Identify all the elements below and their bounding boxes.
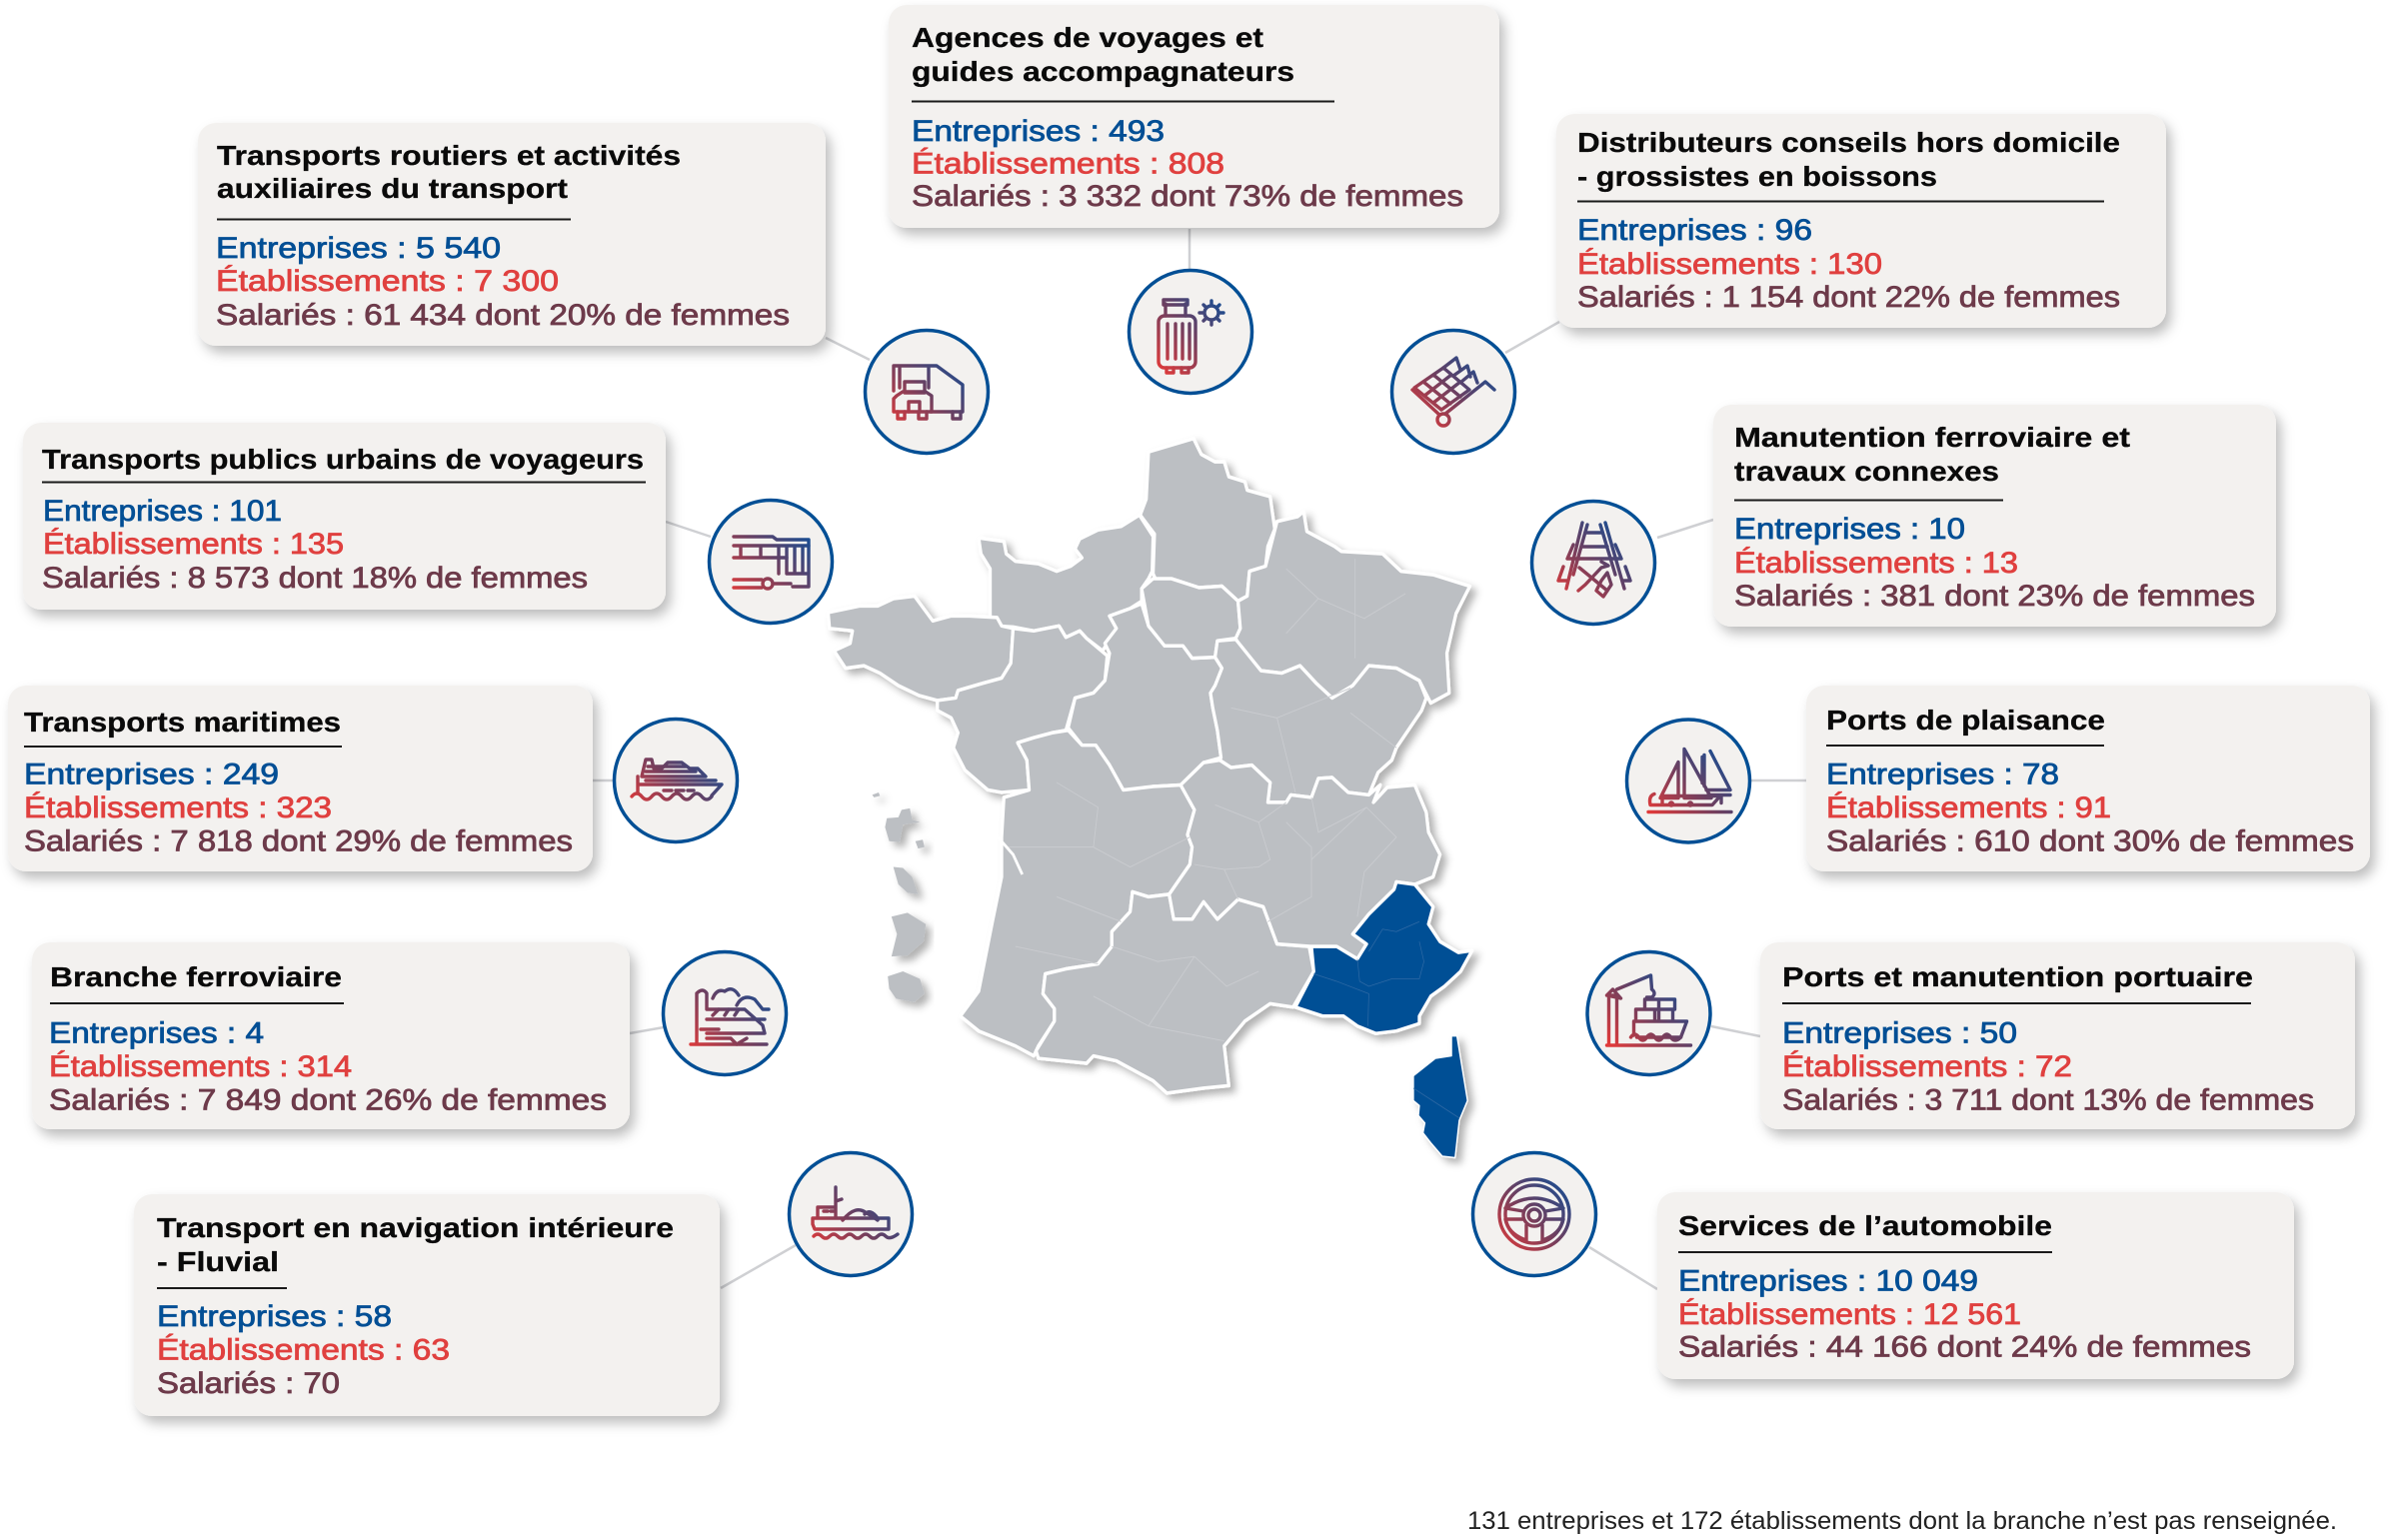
icon: suitcase and sun [1130,270,1251,394]
panel: Agences de voyages: Entreprises : 493 [912,115,1165,148]
panel: Transports maritimes: Établissements : 323 [24,791,332,824]
region: Bretagne [828,596,1014,701]
panel: Distributeurs conseils: Salariés : 1 154 dont 22% de femmes [1577,281,2120,314]
panel: Transports publics urbains: Entreprises : 101 [43,495,282,528]
panel: Agences de voyages: Établissements : 808 [912,148,1224,180]
panel: Ports et manutention portuaire: Établissements : 72 [1782,1050,2072,1083]
panel: Branche ferroviaire [32,942,630,1129]
panel: Transports publics urbains: Transports publics urbains de voyageurs [42,444,644,475]
panel: Transports publics urbains: Établissements : 135 [43,528,344,561]
panel: Ports et manutention portuaire [1760,942,2355,1129]
footnote: 131 entreprises et 172 établissements dont la branche n’est pas renseignée. [1467,1507,2337,1535]
panel: Manutention ferroviaire: travaux connexes [1734,456,1999,487]
icon: cruise ship [614,720,738,841]
panel: Branche ferroviaire: Établissements : 314 [49,1050,352,1083]
region: Pays de la Loire [938,626,1108,792]
panel: Manutention ferroviaire: Établissements : 13 [1734,547,2018,580]
icon: steering wheel [1473,1153,1595,1275]
icon: beverage hand truck [1391,330,1515,454]
region: Auvergne-Rhone-Alpes [1170,761,1440,959]
icon: sailboats [1627,720,1749,842]
panel: Transports maritimes: Transports maritimes [24,707,341,738]
panel: Transports publics urbains [23,423,666,610]
panel: Services de l'automobile: Services de l’automobile [1678,1210,2052,1241]
panel: Transport fluvial: - Fluvial [157,1246,279,1277]
region: Centre-Val de Loire [1069,604,1221,789]
panel: Ports de plaisance: Établissements : 91 [1826,791,2111,824]
panel: Services de l'automobile [1657,1192,2294,1379]
panel: Distributeurs conseils: Établissements : 130 [1577,248,1882,281]
panel: Manutention ferroviaire: Salariés : 381 dont 23% de femmes [1734,580,2255,613]
icon: tram [710,500,832,624]
panel: Branche ferroviaire: Branche ferroviaire [50,961,342,992]
panel: Ports et manutention portuaire: Ports et manutention portuaire [1782,961,2253,992]
icon: river barge [790,1153,912,1275]
panel: Transport fluvial [134,1194,720,1416]
panel: Agences de voyages: Salariés : 3 332 dont 73% de femmes [912,180,1463,213]
icon: crane and container ship [1587,951,1710,1075]
region: Occitanie [1036,891,1313,1093]
panel: Transports maritimes [8,686,593,871]
panel: Distributeurs conseils: - grossistes en boissons [1577,161,1937,192]
panel: Transports routiers: Transports routiers et activités [217,140,681,171]
panel: Services de l'automobile: Établissements : 12 561 [1678,1298,2021,1331]
panel: Services de l'automobile: Entreprises : 10 049 [1678,1265,1978,1297]
panel: Transports routiers [198,123,826,346]
panel: Distributeurs conseils [1556,114,2166,328]
panel: Ports de plaisance: Ports de plaisance [1826,705,2105,736]
panel: Transports maritimes: Salariés : 7 818 dont 29% de femmes [24,825,573,857]
panel: Branche ferroviaire: Salariés : 7 849 dont 26% de femmes [49,1083,607,1117]
region: Bourgogne-Franche-Comte [1210,640,1426,802]
panel: Transports routiers: Salariés : 61 434 dont 20% de femmes [216,299,790,332]
panel: Ports de plaisance: Entreprises : 78 [1826,758,2059,791]
panel: Ports et manutention portuaire: Salariés : 3 711 dont 13% de femmes [1782,1083,2314,1117]
department lines and estuary [1313,921,1459,1118]
region: Normandie [979,515,1154,651]
icon: railway track and tools [1531,502,1655,624]
panel: Transports routiers: Établissements : 7 300 [216,265,559,298]
panel: Distributeurs conseils: Distributeurs conseils hors domicile [1577,127,2120,158]
metropolitan regions [828,439,1472,1158]
map of France [828,439,1472,1158]
panel: Transports routiers: auxiliaires du transport [217,173,568,204]
panel: Ports de plaisance: Salariés : 610 dont 30% de femmes [1826,825,2354,857]
connector lines [593,229,1806,1289]
icon: truck [866,330,988,454]
panel: Transport fluvial: Établissements : 63 [157,1333,450,1367]
panel: Manutention ferroviaire: Manutention ferroviaire et [1734,422,2130,453]
region: Provence-Alpes-Cote d'Azur (highlighted) [1295,881,1472,1033]
panel: Agences de voyages [889,5,1499,228]
panel: Distributeurs conseils: Entreprises : 96 [1577,214,1812,247]
panel: Transports publics urbains: Salariés : 8 573 dont 18% de femmes [42,562,588,595]
region: Grand Est [1235,512,1469,703]
panel: Ports et manutention portuaire: Entreprises : 50 [1782,1017,2017,1049]
panel: Ports de plaisance [1806,686,2370,871]
panel: Manutention ferroviaire: Entreprises : 10 [1734,513,1965,546]
region: Ile-de-France [1142,579,1240,659]
panel: Transports maritimes: Entreprises : 249 [24,758,279,791]
panel: Agences de voyages: guides accompagnateurs [912,56,1294,87]
panel: Transport fluvial: Transport en navigation intérieure [157,1212,674,1243]
panel: Transport fluvial: Entreprises : 58 [157,1300,392,1333]
panel: Transport fluvial: Salariés : 70 [157,1367,340,1400]
region: Nouvelle-Aquitaine [961,731,1195,1056]
panel: Agences de voyages: Agences de voyages et [912,22,1263,53]
panel: Services de l'automobile: Salariés : 44 166 dont 24% de femmes [1678,1331,2251,1363]
panel: Manutention ferroviaire [1713,405,2276,627]
icon: high-speed train [664,951,786,1075]
overseas territories [873,792,926,1002]
region: Corse (highlighted) [1413,1036,1467,1158]
panel: Transports routiers: Entreprises : 5 540 [216,232,501,265]
region: Hauts-de-France [1141,439,1274,601]
panel: Branche ferroviaire: Entreprises : 4 [49,1017,264,1049]
